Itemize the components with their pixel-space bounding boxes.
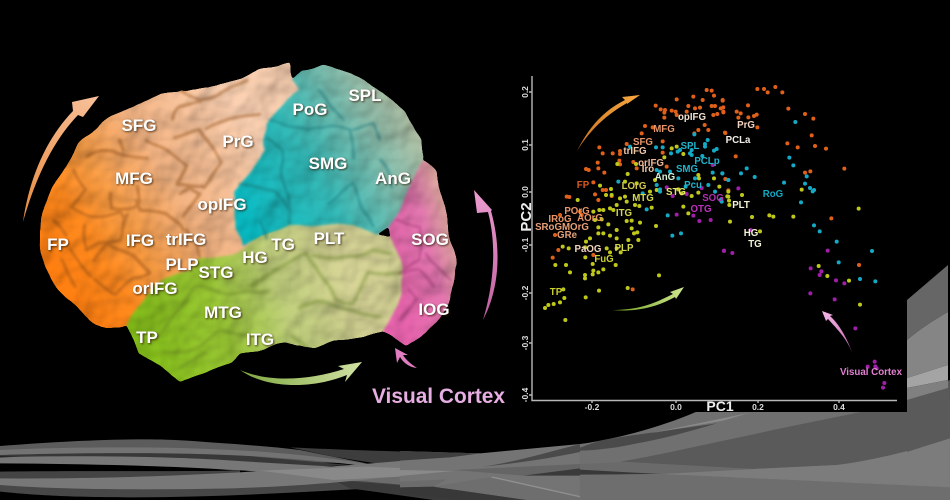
chart point labels: POrG <box>564 206 590 217</box>
chart point labels: MFG <box>653 124 675 135</box>
chart point labels: Iro <box>642 164 654 175</box>
axes <box>529 76 897 403</box>
chart point labels: AnG <box>655 172 675 183</box>
chart point labels: SMG <box>676 164 698 175</box>
chart arrow: green <box>612 287 684 310</box>
series: yellow-green points <box>545 147 860 320</box>
background waves <box>0 265 950 500</box>
chart point labels: STG <box>666 187 686 198</box>
brain region labels: trIFG <box>166 230 206 249</box>
brain region labels: IFG <box>126 231 154 250</box>
chart point labels: Visual Cortex <box>840 367 903 378</box>
y axis tick labels: 0.0 <box>520 186 530 198</box>
y axis tick labels: 0.2 <box>520 86 530 98</box>
y axis tick labels: -0.2 <box>520 285 530 300</box>
chart point labels: PLP <box>615 243 634 254</box>
y axis tick labels: -0.4 <box>520 387 530 402</box>
series: orange points <box>553 87 859 289</box>
label: Visual Cortex: Visual Cortex <box>372 385 505 408</box>
x axis tick labels: 0.2 <box>752 402 764 412</box>
temporal folds <box>157 250 400 367</box>
brain region labels: SFG <box>122 116 156 135</box>
chart point labels: SOG <box>702 193 724 204</box>
x axis tick labels <box>585 402 845 412</box>
y axis tick labels: 0.1 <box>520 139 530 151</box>
chart arrow: pink <box>822 311 853 355</box>
chart point labels: SFG <box>633 137 653 148</box>
chart point labels: OTG <box>690 204 712 215</box>
brain region labels: HG <box>242 248 268 267</box>
chart point labels: FP <box>577 180 590 191</box>
brain region labels: TP <box>136 328 158 347</box>
series: cyan points <box>618 122 875 281</box>
brain region labels: AnG <box>375 169 411 188</box>
y axis tick labels: -0.3 <box>520 335 530 350</box>
chart point labels: PCLa <box>726 135 751 146</box>
occipital lobe <box>383 160 457 345</box>
chart point labels <box>535 112 903 378</box>
chart point labels: PLT <box>732 200 750 211</box>
frontal folds <box>53 80 260 293</box>
chart point labels: GRe <box>557 230 578 241</box>
chart point labels: TG <box>748 239 762 250</box>
arrow: green temporal <box>240 362 362 385</box>
chart point labels: Pcu <box>684 180 702 191</box>
chart point labels: SPL <box>681 141 700 152</box>
brain region labels: STG <box>199 263 233 282</box>
brain region labels: PLP <box>165 255 199 274</box>
brain region labels: MTG <box>204 303 242 322</box>
x axis tick labels: 0.4 <box>833 402 845 412</box>
brain region labels: PoG <box>293 100 327 119</box>
brain region labels: opIFG <box>197 195 247 214</box>
chart point labels: LOrG <box>622 181 646 192</box>
chart point labels: IRoG <box>548 214 572 225</box>
chart point labels: orIFG <box>638 158 664 169</box>
series: magenta points <box>667 165 884 388</box>
brain region labels: TG <box>271 235 295 254</box>
arrow: pink occipital <box>474 190 498 320</box>
x axis tick labels: -0.2 <box>585 402 600 412</box>
chart point labels: trIFG <box>623 146 647 157</box>
brain region labels: FP <box>47 235 69 254</box>
chart point labels: ITG <box>616 208 632 219</box>
parietal folds <box>240 90 393 240</box>
chart point labels: AOrG <box>577 213 603 224</box>
brain region labels: SOG <box>411 230 449 249</box>
brain region labels: PLT <box>314 229 345 248</box>
brain region labels: SMG <box>309 154 347 173</box>
chart point labels: SRoGMOrG <box>535 222 589 233</box>
x axis tick labels: 0.0 <box>670 402 682 412</box>
chart point labels: FuG <box>594 254 614 265</box>
x axis title: PC1 <box>706 398 734 414</box>
chart point labels: PrG <box>737 120 755 131</box>
brain region labels: PrG <box>222 132 254 151</box>
chart point labels: RoG <box>763 189 783 200</box>
brain region labels: orIFG <box>132 279 178 298</box>
temporal lobe <box>127 225 403 382</box>
chart point labels: PCLp <box>694 156 720 167</box>
chart point labels: MTG <box>632 193 654 204</box>
brain illustration <box>40 62 457 382</box>
chart point labels: TP <box>550 287 563 298</box>
brain region labels: IOG <box>418 300 450 319</box>
frontal lobe <box>40 62 298 329</box>
PCA scatter panel <box>510 70 907 414</box>
y axis tick labels: -0.1 <box>520 237 530 252</box>
brain region labels: SPL <box>348 86 382 105</box>
chart point labels: PaOG <box>575 244 601 255</box>
parietal lobe <box>233 65 423 247</box>
chart point labels: HG <box>744 228 758 239</box>
occipital folds <box>397 220 450 320</box>
chart point labels: opIFG <box>678 112 706 123</box>
y axis tick labels <box>520 86 530 402</box>
brain region labels <box>47 86 450 349</box>
brain region labels: MFG <box>115 169 153 188</box>
arrow: small pink to visual cortex <box>395 348 417 368</box>
chart arrow: orange <box>577 95 640 151</box>
brain region labels: ITG <box>246 330 274 349</box>
arrow: orange frontal <box>23 96 99 222</box>
y axis title: PC2 <box>518 202 535 232</box>
